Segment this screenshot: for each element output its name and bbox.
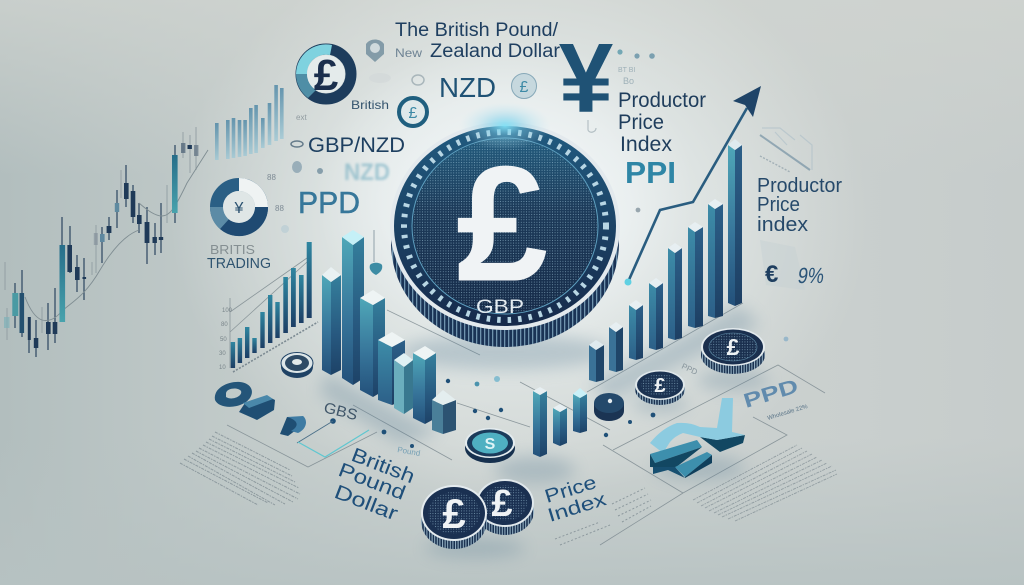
producer price index text: right: index [757,214,808,236]
3D bars: left cluster [322,230,456,434]
small faded marks: Bo [623,76,634,86]
Price Index rotated text: Price [542,472,599,508]
small faded PPD text: PPD [680,362,699,377]
small coin: middle [635,370,685,405]
pound coins: bottom pair: £ [442,490,466,537]
small icon: pale coin [512,74,536,98]
mini card: document sketch [760,128,812,172]
percentage card: 9% [796,263,826,288]
donut chart: trading [210,178,268,236]
British trading label: BRITIS [210,242,255,257]
title text [395,20,561,62]
producer price index text: right [757,175,842,236]
small faded label: Pound [397,445,421,458]
British Pound Dollar rotated text: Pound [335,459,408,505]
small coin: right [701,328,765,374]
chart: rising bars [219,242,318,372]
donut chart: pound: £ [314,51,339,100]
British Pound Dollar rotated text [331,444,418,525]
small faded marks: 88 [275,204,284,213]
donut chart: pound [296,44,351,100]
British Pound Dollar rotated text: Dollar [331,481,401,525]
PPD rotated label [741,375,809,422]
Price Index rotated text: Index [545,489,609,527]
soft floor shadows [320,305,769,558]
small icon: teal ring coin: £ [409,105,418,122]
title text: The British Pound/ [395,20,559,41]
small table lines near price index [555,488,651,545]
PPD rotated label: Wholesale 22% [767,404,809,422]
main coin: GBP [390,102,620,347]
GBS rotated label: GBS [322,399,359,424]
PPI label: PPI [625,155,676,190]
small faded marks: 88 [267,173,276,182]
trend arrow [624,86,761,286]
chart: rising bars: 50 [220,337,227,343]
producer price index text: Price [618,111,664,134]
small faded marks: ext [296,113,307,122]
paragraph lines: right [693,445,837,521]
PPD rotated label: PPD [741,375,801,413]
chart: rising bars: 80 [221,322,228,328]
network nodes [330,376,655,448]
pound symbol: £ [457,132,547,315]
floor grid lines [227,303,825,545]
producer price index text [618,89,706,156]
cyan connector [297,421,369,457]
small faded marks: BT BI [618,67,635,74]
3D blue letter shapes [215,382,306,436]
blurred NZD label: NZD [344,159,390,186]
teal coin [465,428,515,463]
pound coins: bottom pair [421,479,534,549]
small faded marks [267,49,788,341]
producer price index text: Index [620,133,673,156]
yen symbol: ¥ [559,23,614,133]
Price Index rotated text [542,472,609,527]
small coin: middle: £ [654,375,666,397]
teal coin: S [485,436,496,453]
GBP/NZD label: GBP/NZD [308,134,405,157]
3D blue currency shape [650,398,745,478]
NZD label: NZD [439,72,496,103]
chart: rising bars: 30 [219,351,226,357]
donut chart: trading: ¥ [234,200,244,217]
small coin: right: £ [727,334,740,360]
chart: rising bars: 100 [222,308,233,314]
British label: British [351,98,389,112]
coin label: GBP [476,297,524,318]
3D bars: front small [533,387,587,457]
title text: Zealand Dollar [430,41,561,62]
British Pound Dollar rotated text: British [348,444,418,488]
chart: light top bars [215,85,284,160]
small icon: teal ring coin [399,98,427,126]
candlestick chart [4,127,208,357]
3D bars: right rising series [589,139,742,382]
small icon: shield [366,40,384,62]
British trading label [207,242,271,272]
small icon: pale coin: £ [520,79,529,96]
pound coins: bottom pair: £ [491,483,513,525]
chart: rising bars: 10 [219,365,226,371]
pendant marker [370,230,382,275]
dark puck [594,393,624,421]
producer price index text: right: Productor [757,175,842,197]
percentage card: € [765,261,778,288]
left puck [281,352,313,378]
soft glow behind coin [315,40,695,350]
percentage card [760,240,826,290]
producer price index text: right: Price [757,194,800,216]
paragraph lines: left [180,432,300,505]
British trading label: TRADING [207,255,271,272]
PPD label: PPD [298,185,360,220]
title text: New [395,46,422,60]
producer price index text: Productor [618,89,706,112]
